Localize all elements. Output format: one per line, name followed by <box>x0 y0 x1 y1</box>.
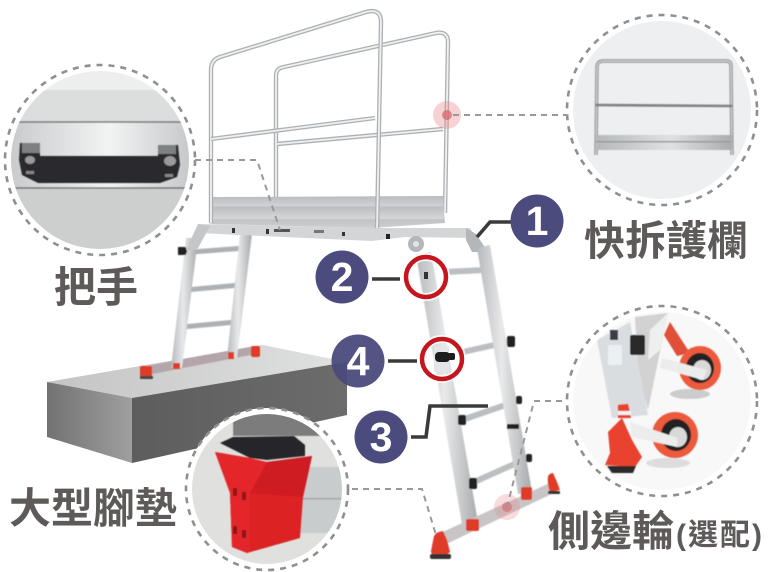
right ladder <box>416 245 560 559</box>
red ring: knob 4 <box>422 339 462 379</box>
label: quick release guard rail: 快拆護欄 <box>584 218 748 264</box>
badge 2: 2 <box>331 254 353 300</box>
icon: foot pad <box>215 436 312 553</box>
left ladder on block <box>140 234 260 379</box>
badge 1: 1 <box>526 198 548 244</box>
badge 3: 3 <box>370 414 392 460</box>
badge 3 <box>354 410 408 464</box>
platform with guard rails <box>186 11 488 252</box>
leader: side wheel <box>507 401 562 507</box>
icon: red foot on wheel unit <box>605 404 642 473</box>
back guard rail <box>276 33 448 213</box>
panel: guard rail detail <box>567 15 757 205</box>
rungs <box>445 270 530 483</box>
panel: side wheel detail <box>567 306 757 496</box>
deck bar and hinges <box>198 224 476 241</box>
label: side wheels: 側邊輪 <box>548 508 674 555</box>
badge 1 <box>510 194 564 248</box>
label: optional: (選配) <box>676 519 764 552</box>
red highlight dots <box>433 101 520 520</box>
connectors to number badges <box>372 222 512 437</box>
right stile <box>477 245 532 494</box>
icon: upper wheel <box>660 346 721 390</box>
panel: foot pad detail <box>186 408 348 570</box>
feet <box>431 473 560 556</box>
concrete block <box>47 345 347 463</box>
icon: black handle <box>19 143 180 183</box>
badge 2 <box>316 250 368 304</box>
red ring: latch 2 <box>406 257 446 297</box>
leader: foot <box>352 489 436 535</box>
label: handle: 把手 <box>54 264 138 311</box>
label: large foot pad: 大型腳墊 <box>9 485 177 532</box>
icon: lower wheel <box>630 412 698 458</box>
platform plate <box>210 196 445 228</box>
icon: guard rail <box>595 61 732 155</box>
panel: handle detail <box>5 65 195 258</box>
badge 4 <box>332 334 384 388</box>
badge 4: 4 <box>347 338 370 384</box>
leader: handle <box>195 160 280 230</box>
left stile <box>416 252 479 530</box>
base bar <box>436 481 558 547</box>
rung end caps <box>458 336 532 489</box>
front guard rail <box>211 11 381 230</box>
leader: guard rail <box>453 114 567 116</box>
